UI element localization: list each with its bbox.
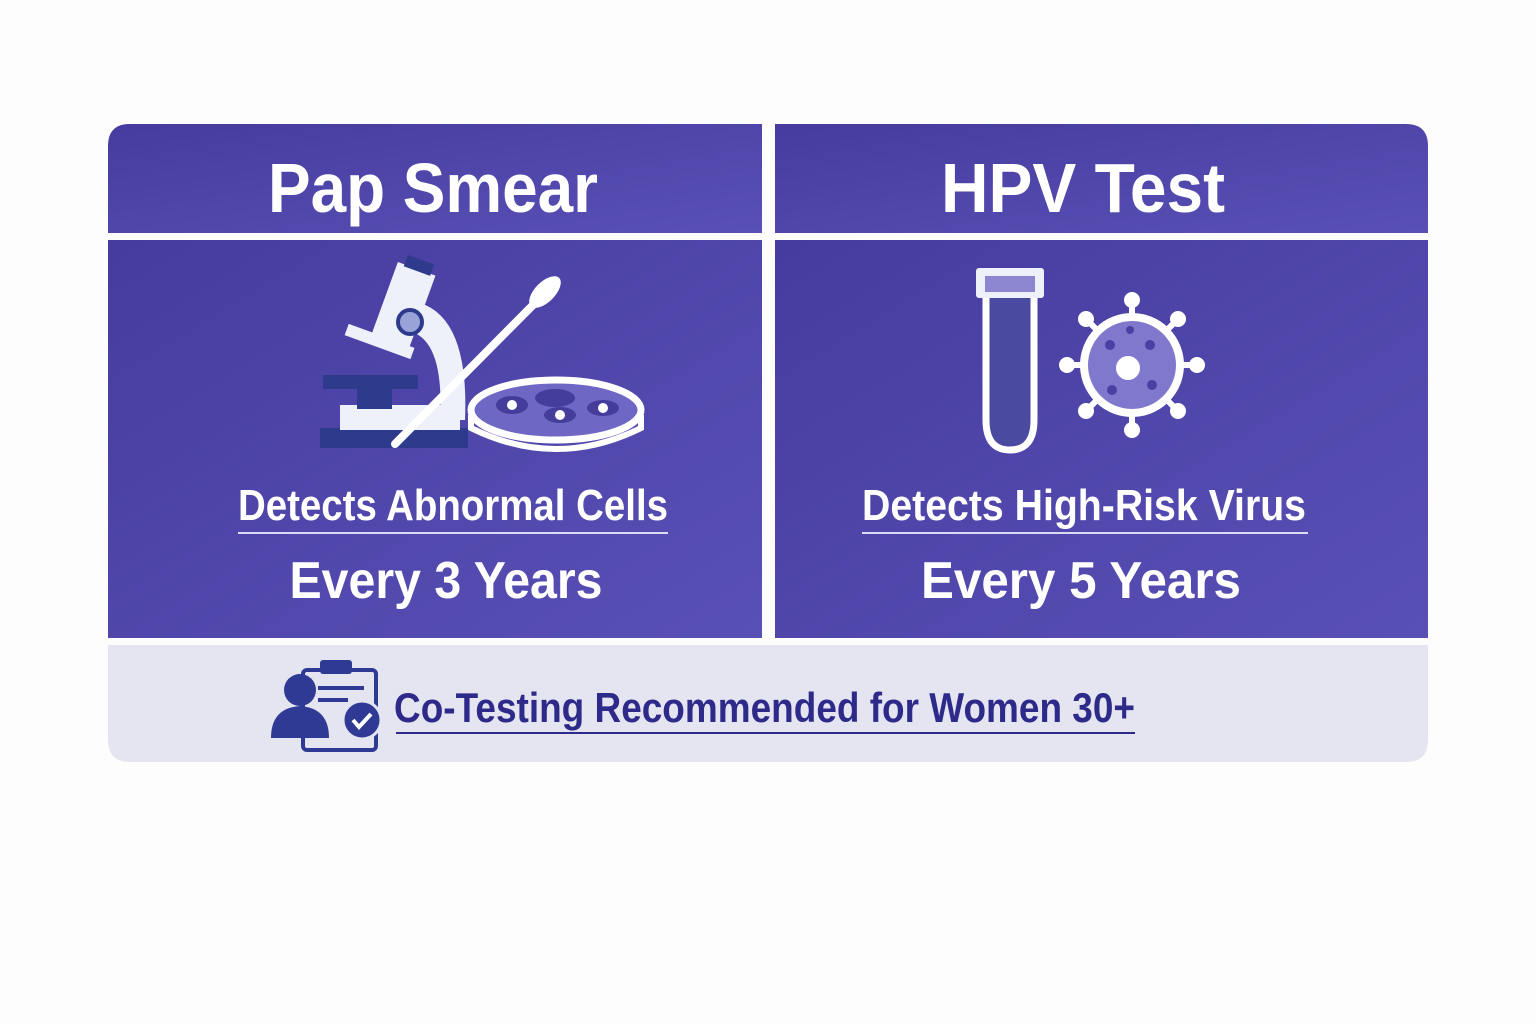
icon: test tube and virus [976,268,1205,450]
text: every 3 years: Every 3 Years [290,552,602,610]
panel: pap smear body [108,240,762,638]
panel: hpv body [775,240,1428,638]
title: Pap Smear: Pap Smear [268,149,598,227]
icon: woman with clipboard [271,660,381,750]
callout: co-testing [271,660,1135,750]
title: HPV Test: HPV Test [941,149,1225,227]
panel: hpv header [775,124,1428,233]
icon: microscope swab petri dish [320,244,641,449]
panel: pap smear header [108,124,762,233]
panel: bottom band [108,645,1428,762]
callout: co-testing: Co-Testing Recommended for Women 30+ [394,684,1135,731]
text: detects high-risk virus: Detects High-Risk Virus [862,481,1306,530]
text: every 5 years: Every 5 Years [921,552,1241,610]
text: detects abnormal cells: Detects Abnormal Cells [238,481,668,530]
